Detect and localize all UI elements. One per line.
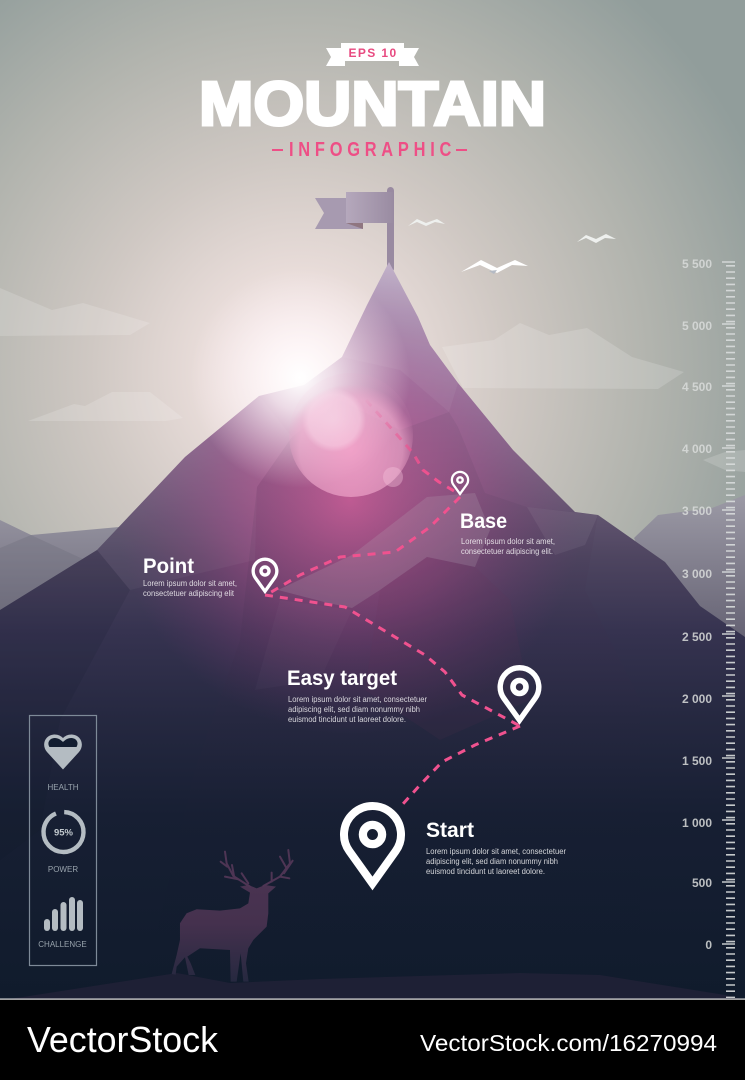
birds (408, 219, 616, 274)
label: power: POWER (48, 865, 78, 874)
text: start: Start (426, 819, 474, 842)
icon: challenge bars (44, 897, 83, 931)
altitude ruler: 500 (692, 876, 712, 890)
clouds (0, 288, 745, 472)
text: easy target: euismod tincidunt ut laoreet dolore. (288, 715, 406, 724)
text: easy target (287, 667, 427, 724)
footer band (0, 998, 745, 1080)
text: start: euismod tincidunt ut laoreet dolore. (426, 867, 545, 876)
text: start (426, 819, 566, 876)
altitude ruler: 1 000 (682, 816, 712, 830)
text: point: consectetuer adipiscing elit (143, 589, 235, 598)
ribbon badge: EPS 10 (348, 46, 398, 60)
mountain (0, 262, 745, 1000)
lens flare (289, 373, 413, 497)
pin: easy target (500, 668, 539, 720)
pin: base (452, 472, 468, 494)
sun glow (185, 265, 415, 495)
icon: power ring (43, 811, 84, 853)
altitude ruler: 5 500 (682, 257, 712, 271)
ribbon badge (326, 43, 419, 66)
text: base (460, 510, 555, 556)
text: start: Lorem ipsum dolor sit amet, consectetuer (426, 847, 566, 856)
label: health: HEALTH (48, 783, 79, 792)
pin: point (253, 559, 277, 591)
deer silhouette (172, 850, 293, 982)
text: point: Point (143, 555, 194, 578)
text: base: consectetuer adipiscing elit. (461, 547, 553, 556)
altitude ruler: 4 500 (682, 380, 712, 394)
title: MOUNTAIN (199, 70, 546, 139)
back mountains (0, 495, 745, 660)
text: easy target: adipiscing elit, sed diam nonummy nibh (288, 705, 420, 714)
altitude ruler: 2 000 (682, 692, 712, 706)
dashed route (265, 400, 520, 805)
altitude ruler: 5 000 (682, 319, 712, 333)
altitude ruler (682, 257, 735, 998)
pin: start (344, 806, 401, 884)
ground (0, 973, 745, 1000)
label: challenge: CHALLENGE (38, 940, 87, 949)
text: point (143, 555, 237, 598)
altitude ruler: 4 000 (682, 442, 712, 456)
icon: heart (44, 734, 82, 770)
altitude ruler: 1 500 (682, 754, 712, 768)
text: point: Lorem ipsum dolor sit amet, (143, 579, 237, 588)
icon: power ring: 95% (54, 828, 74, 838)
subtitle: INFOGRAPHIC (289, 137, 451, 160)
altitude ruler: 3 000 (682, 567, 712, 581)
stats panel (30, 716, 96, 966)
text: base: Base (460, 510, 507, 533)
footer band: VectorStock.com/16270994 (420, 1030, 717, 1056)
footer band: VectorStock (27, 1019, 219, 1060)
altitude ruler: 0 (705, 938, 712, 952)
flag (315, 187, 394, 272)
text: easy target: Lorem ipsum dolor sit amet, consectetuer (288, 695, 427, 704)
altitude ruler: 2 500 (682, 630, 712, 644)
text: easy target: Easy target (287, 667, 397, 690)
altitude ruler: 3 500 (682, 504, 712, 518)
text: start: adipiscing elit, sed diam nonummy nibh (426, 857, 558, 866)
text: base: Lorem ipsum dolor sit amet, (461, 537, 555, 546)
